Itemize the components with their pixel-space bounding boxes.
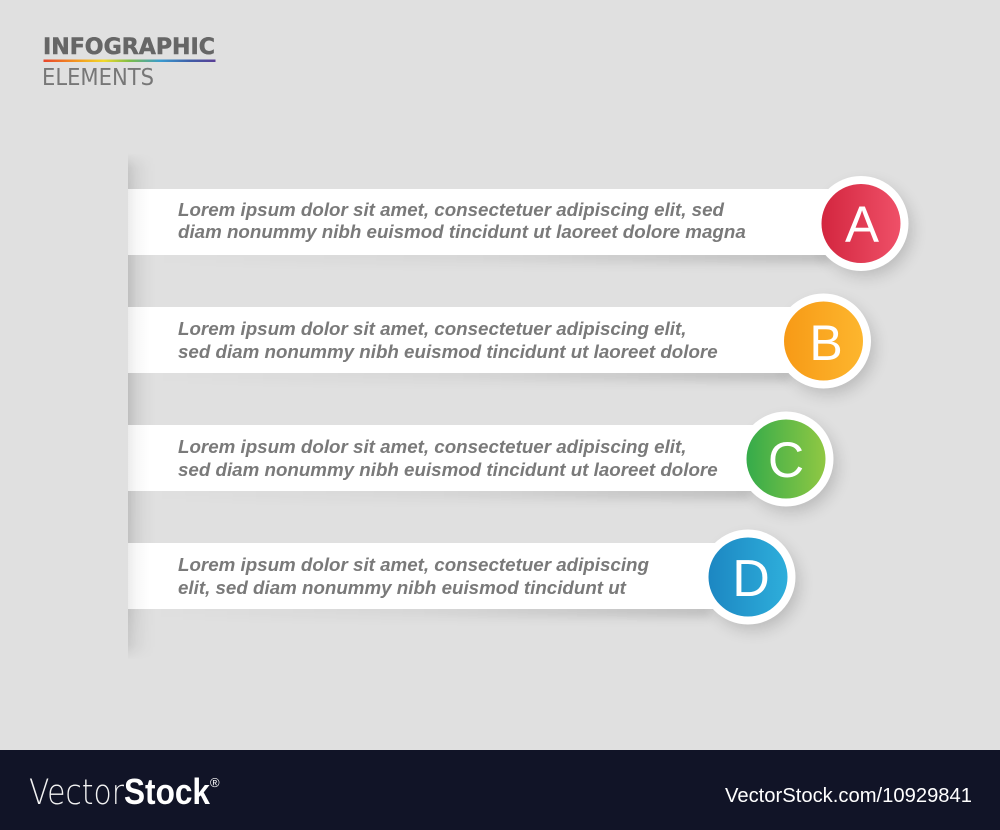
footer logo: Stock bbox=[124, 771, 211, 812]
bar A bbox=[128, 189, 838, 255]
circle badge C: C bbox=[768, 432, 804, 488]
circle shadow C bbox=[745, 420, 837, 512]
bar D bbox=[128, 543, 724, 609]
circle shadow D bbox=[707, 538, 799, 630]
bar B bbox=[128, 307, 800, 373]
bar shadow C bbox=[150, 485, 750, 499]
logo subtitle: ELEMENTS bbox=[42, 65, 154, 91]
text C: sed diam nonummy nibh euismod tincidunt ut laoreet dolore bbox=[178, 459, 718, 480]
footer registered mark: ® bbox=[210, 775, 220, 790]
circle badge B: B bbox=[809, 315, 843, 371]
bar C bbox=[128, 425, 762, 491]
circle badge A: A bbox=[845, 196, 879, 253]
bar shadow A bbox=[150, 249, 830, 263]
vertical spine shadow bbox=[128, 158, 143, 654]
bar shadow B bbox=[150, 367, 790, 381]
bar shadow D bbox=[150, 603, 710, 617]
text D: Lorem ipsum dolor sit amet, consectetuer adipiscing bbox=[178, 554, 649, 575]
text A: diam nonummy nibh euismod tincidunt ut laoreet dolore magna bbox=[178, 221, 746, 242]
logo rainbow rule bbox=[44, 60, 216, 62]
logo title: INFOGRAPHIC bbox=[43, 35, 215, 60]
panel: row B bbox=[128, 294, 874, 394]
footer logo: Vector bbox=[29, 773, 125, 813]
footer band bbox=[0, 750, 1000, 830]
circle shadow A bbox=[820, 184, 912, 276]
circle badge A bbox=[814, 176, 908, 271]
circle badge D: D bbox=[732, 550, 770, 608]
text B: Lorem ipsum dolor sit amet, consectetuer adipiscing elit, bbox=[178, 318, 686, 339]
text B: sed diam nonummy nibh euismod tincidunt ut laoreet dolore bbox=[178, 341, 718, 362]
logo: infographic elements bbox=[42, 35, 216, 91]
text D: elit, sed diam nonummy nibh euismod tincidunt ut bbox=[178, 577, 627, 598]
footer logo bbox=[29, 771, 211, 813]
footer url: VectorStock.com/10929841 bbox=[725, 785, 972, 807]
circle shadow B bbox=[782, 302, 874, 394]
panel: row C bbox=[128, 412, 837, 512]
circle badge B bbox=[776, 294, 871, 388]
text A: Lorem ipsum dolor sit amet, consectetuer adipiscing elit, sed bbox=[178, 199, 725, 220]
text C: Lorem ipsum dolor sit amet, consectetuer adipiscing elit, bbox=[178, 436, 686, 457]
panel: row D bbox=[128, 530, 799, 630]
circle badge D bbox=[700, 530, 796, 624]
panel: row A bbox=[128, 176, 912, 276]
circle badge C bbox=[738, 412, 834, 506]
